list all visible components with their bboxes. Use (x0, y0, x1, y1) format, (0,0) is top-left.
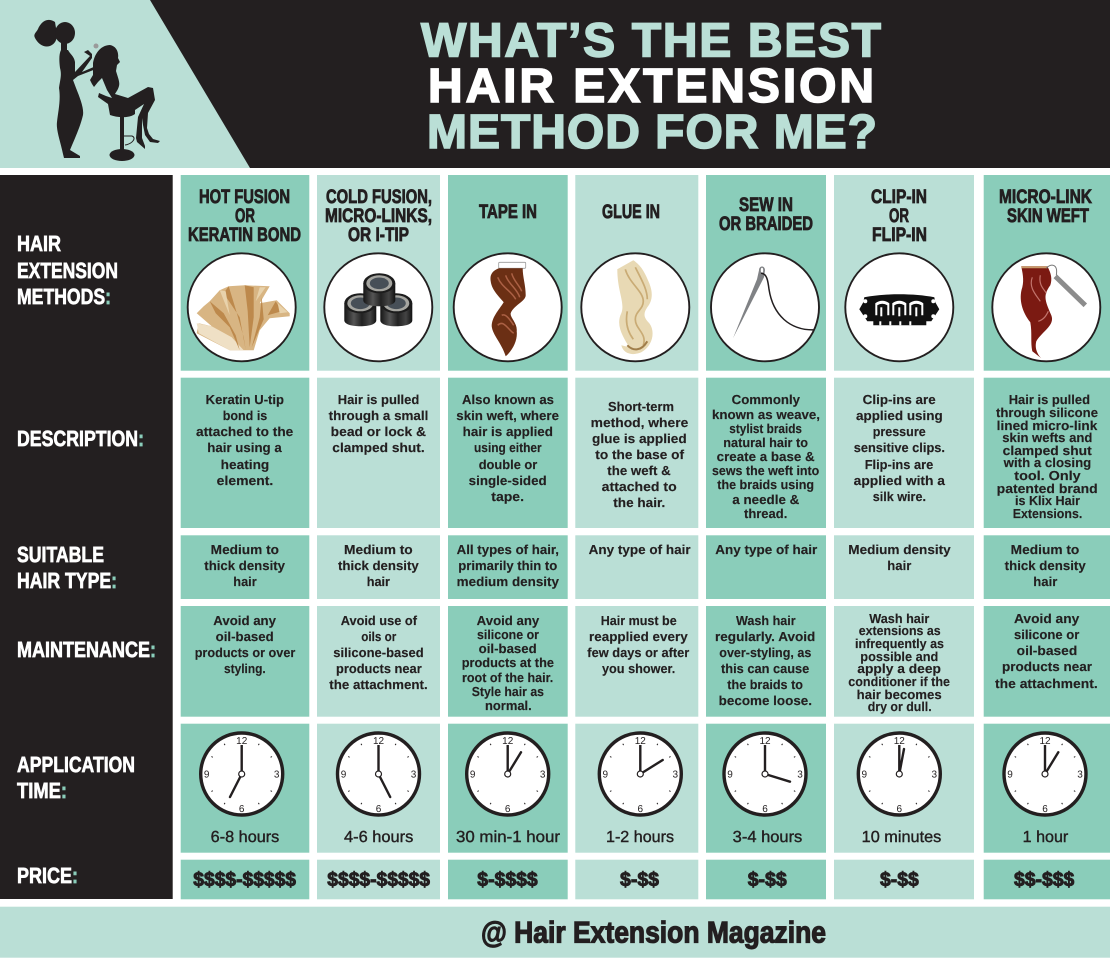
icon: micro-link skin weft and tool (992, 253, 1100, 361)
description: micro-link skin weft: clamped shut (1003, 443, 1092, 458)
method: clip-in or flip-in: CLIP-IN (871, 186, 927, 208)
maintenance: micro-link: oil-based (1017, 643, 1077, 658)
description: cold fusion: Hair is pulled (338, 392, 419, 407)
maintenance: glue in: Hair must be (601, 613, 677, 628)
hair type: cold fusion: Medium to (344, 542, 413, 557)
maintenance: cold fusion: silicone-based (333, 645, 424, 660)
time: 6-8 hours (181, 724, 309, 853)
description: sew in: stylist braids (729, 421, 802, 436)
description: micro-link skin weft: patented brand (997, 481, 1098, 496)
maintenance: glue in: few days or after (587, 645, 689, 660)
price: glue in (575, 860, 698, 899)
price: hot fusion: $$$$-$$$$$ (193, 869, 296, 891)
description: glue in: glue is applied (592, 431, 687, 446)
icon: clock: 12 (635, 736, 646, 747)
time: 1 hour: 1 hour (1023, 829, 1069, 846)
title: WHAT’S THE BEST (421, 14, 881, 68)
header dark background (0, 0, 1110, 168)
hair type: glue in (575, 535, 698, 599)
maintenance: glue in: reapplied every (589, 629, 688, 644)
footer credit bar: @ Hair Extension Magazine (481, 917, 826, 950)
hair type: micro-link: hair (1033, 574, 1057, 589)
description: micro-link skin weft: through silicone (996, 405, 1098, 420)
hair type: tape in: All types of hair, (457, 542, 559, 557)
maintenance: cold fusion: products near (336, 661, 422, 676)
maintenance: cold fusion: the attachment. (329, 677, 428, 692)
header teal wedge (0, 0, 250, 168)
icon: clock: 9 (603, 770, 609, 780)
description: tape in: single-sided (469, 473, 547, 488)
icon: clock: 12 (236, 736, 248, 747)
method: cold fusion, micro-links or i-tip: MICRO-LINKS, (325, 205, 432, 227)
icon: clock: 6 (897, 804, 903, 815)
hair type: cold fusion (317, 535, 440, 599)
hair type: clip-in: hair (887, 558, 911, 573)
hair type: micro-link: thick density (1005, 558, 1086, 573)
maintenance: tape in: silicone or (477, 627, 539, 642)
icon: clock: 12 (1039, 736, 1051, 747)
method: cold fusion, micro-links or i-tip: OR I-TIP (348, 224, 409, 246)
icon: tape-in hair weft (454, 253, 562, 361)
maintenance: hot fusion: products or over (195, 645, 295, 660)
row: hair extension methods (181, 175, 1110, 371)
description: tape in: skin weft, where (456, 408, 559, 423)
icon: clock (858, 733, 940, 815)
maintenance: micro-link: products near (1002, 659, 1092, 674)
method: clip-in or flip-in: FLIP-IN (872, 224, 927, 246)
time: 6-8 hours: 6-8 hours (211, 829, 279, 846)
maintenance: sew in: this can cause (721, 661, 809, 676)
description: micro-link skin weft: is Klix Hair (1015, 493, 1080, 508)
price: clip-in (834, 860, 974, 899)
icon: clock: 3 (274, 770, 280, 780)
description: cold fusion: through a small (329, 408, 428, 423)
time: 1 hour (984, 724, 1110, 853)
icon: micro-link beads (324, 253, 432, 361)
maintenance: sew in: regularly. Avoid (715, 629, 815, 644)
description: hot fusion (181, 378, 309, 528)
method: tape in (448, 175, 568, 371)
method: hot fusion or keratin bond: OR (235, 205, 255, 227)
description: micro-link skin weft: Hair is pulled (1009, 392, 1090, 407)
description: tape in: Also known as (462, 392, 554, 407)
hair type: tape in: medium density (457, 574, 560, 589)
description: micro-link skin weft: with a closing (1003, 455, 1091, 470)
price: cold fusion: $$$$-$$$$$ (327, 869, 430, 891)
title: HAIR EXTENSION (428, 60, 874, 113)
method: sew in or braided: OR BRAIDED (719, 213, 813, 235)
time: 4-6 hours: 4-6 hours (344, 829, 413, 846)
hair type: sew in: Any type of hair (715, 542, 817, 557)
footer credit bar (0, 907, 1110, 958)
icon: hair clip (845, 253, 953, 361)
maintenance: hot fusion: styling. (224, 661, 266, 676)
panel: row labels: APPLICATION (17, 752, 135, 777)
description: sew in (706, 378, 826, 528)
description: clip-in: Flip-ins are (865, 457, 933, 472)
icon: clock (338, 733, 420, 815)
method: clip-in or flip-in (834, 175, 974, 371)
maintenance: clip-in: conditioner if the (848, 674, 950, 689)
hair type: tape in (448, 535, 568, 599)
description: tape in: double or (479, 457, 537, 472)
hair type: clip-in (834, 535, 974, 599)
hair type: hot fusion: thick density (204, 558, 286, 573)
description: hot fusion: heating (221, 457, 269, 472)
panel: row labels: EXTENSION (17, 258, 118, 283)
icon: clock: 12 (894, 736, 905, 747)
description: sew in: Commonly (732, 392, 801, 407)
description: sew in: thread. (744, 506, 787, 521)
maintenance: glue in: you shower. (602, 661, 675, 676)
description: hot fusion: element. (217, 473, 273, 488)
price: glue in: $-$$ (620, 869, 659, 891)
method: glue in: GLUE IN (602, 201, 660, 223)
panel: row labels: HAIR TYPE: (17, 568, 117, 593)
icon: clock: 12 (373, 736, 384, 747)
icon: clock: 9 (862, 770, 868, 780)
description: glue in: the weft & (607, 463, 671, 478)
panel: row labels (0, 175, 173, 899)
icon: needle and thread (711, 253, 819, 361)
maintenance: tape in (448, 606, 568, 717)
icon: clock: 6 (376, 804, 382, 815)
method: sew in or braided (706, 175, 826, 371)
description: glue in: Short-term (608, 399, 674, 414)
price: micro-link: $$-$$$ (1014, 869, 1074, 891)
price: hot fusion (181, 860, 309, 899)
description: micro-link skin weft: Extensions. (1013, 506, 1082, 521)
maintenance: micro-link (984, 606, 1110, 717)
icon: glue-in blonde weft (581, 253, 689, 361)
description: glue in: the hair. (613, 495, 665, 510)
description: glue in: to the base of (595, 447, 685, 462)
icon: clock (467, 733, 549, 815)
icon: clock (599, 733, 681, 815)
icon: clock: 9 (204, 770, 210, 780)
icon: clock (724, 733, 806, 815)
icon: clock: 3 (411, 770, 417, 780)
method: glue in (575, 175, 698, 371)
panel: row labels: METHODS: (17, 284, 111, 309)
panel: row labels: HAIR (17, 231, 61, 256)
hair type: micro-link: Medium to (1011, 542, 1079, 557)
icon: clock: 3 (932, 770, 938, 780)
maintenance: sew in: become loose. (719, 693, 812, 708)
title (421, 14, 881, 159)
description: clip-in: silk wire. (873, 489, 926, 504)
price: tape in (448, 860, 568, 899)
time: 30 min-1 hour (448, 724, 568, 853)
price: cold fusion (317, 860, 440, 899)
maintenance: tape in: Style hair as (472, 684, 544, 699)
icon: clock: 9 (1007, 770, 1013, 780)
description: clip-in: sensitive clips. (854, 440, 945, 455)
maintenance: micro-link: Avoid any (1014, 611, 1080, 626)
maintenance: tape in: oil-based (479, 641, 537, 656)
description: clip-in: Clip-ins are (863, 392, 936, 407)
hair type: glue in: Any type of hair (589, 542, 691, 557)
icon: clock: 6 (638, 804, 644, 815)
price: clip-in: $-$$ (880, 869, 919, 891)
maintenance: tape in: Avoid any (477, 613, 540, 628)
maintenance: sew in: Wash hair (736, 613, 796, 628)
icon: clock: 3 (797, 770, 803, 780)
description: micro-link skin weft: skin wefts and (1002, 430, 1092, 445)
description: hot fusion: attached to the (196, 424, 293, 439)
maintenance: clip-in: Wash hair (869, 611, 929, 626)
description: hot fusion: hair using a (207, 440, 282, 455)
description: hot fusion: Keratin U-tip (206, 392, 284, 407)
icon: clock: 3 (540, 770, 546, 780)
method: cold fusion, micro-links or i-tip: COLD FUSION, (326, 186, 432, 208)
icon: clock: 6 (505, 804, 511, 815)
icon: clock: 3 (1077, 770, 1083, 780)
row: suitable hair type (181, 535, 1110, 599)
maintenance: cold fusion: Avoid use of (341, 613, 418, 628)
maintenance: clip-in: hair becomes (857, 687, 942, 702)
price: sew in: $-$$ (748, 869, 787, 891)
maintenance: tape in: products at the (462, 655, 554, 670)
description: tape in: tape. (491, 489, 524, 504)
description: clip-in: pressure (873, 424, 926, 439)
maintenance: cold fusion: oils or (361, 629, 396, 644)
icon: clock: 9 (727, 770, 733, 780)
description: sew in: create a base & (717, 449, 815, 464)
method: clip-in or flip-in: OR (889, 205, 909, 227)
description: tape in: hair is applied (463, 424, 553, 439)
method: hot fusion or keratin bond: KERATIN BOND (188, 224, 301, 246)
maintenance: hot fusion: oil-based (216, 629, 274, 644)
panel: row labels: PRICE: (17, 863, 78, 888)
description: clip-in: applied using (856, 408, 943, 423)
hair type: sew in (706, 535, 826, 599)
row: maintenance (181, 606, 1110, 717)
description: glue in: attached to (602, 479, 677, 494)
row: application time (181, 724, 1110, 853)
page header (0, 0, 1110, 168)
description: sew in: sews the weft into (712, 463, 819, 478)
panel: row labels: SUITABLE (17, 542, 104, 567)
time: 1-2 hours (575, 724, 698, 853)
maintenance: micro-link: silicone or (1014, 627, 1079, 642)
price: sew in (706, 860, 826, 899)
panel: row labels: MAINTENANCE: (17, 637, 156, 662)
hair type: hot fusion (181, 535, 309, 599)
hair type: clip-in: Medium density (848, 542, 951, 557)
maintenance: hot fusion: Avoid any (213, 613, 277, 628)
method: hot fusion or keratin bond: HOT FUSION (199, 186, 290, 208)
description: micro-link skin weft: tool. Only (1014, 468, 1082, 483)
time: 10 minutes (834, 724, 974, 853)
description: tape in: using either (474, 440, 542, 455)
panel: row labels: DESCRIPTION: (17, 426, 144, 451)
icon: clock: 12 (502, 736, 514, 747)
maintenance: tape in: root of the hair. (462, 670, 553, 685)
maintenance: clip-in: apply a deep (857, 661, 941, 676)
description: glue in: method, where (591, 415, 688, 430)
method: hot fusion or keratin bond (181, 175, 309, 371)
description: glue in (575, 378, 698, 528)
time: 1-2 hours: 1-2 hours (606, 829, 674, 846)
maintenance: clip-in: infrequently as (855, 636, 944, 651)
icon: salon silhouette (34, 20, 160, 161)
icon: clock: 6 (239, 804, 245, 815)
icon: clock: 6 (1042, 804, 1048, 815)
description: clip-in (834, 378, 974, 528)
panel: row labels: TIME: (17, 778, 67, 803)
hair type: micro-link (984, 535, 1110, 599)
description: hot fusion: bond is (223, 408, 267, 423)
description: sew in: natural hair to (723, 435, 808, 450)
hair type: tape in: primarily thin to (458, 558, 557, 573)
hair type: cold fusion: thick density (338, 558, 419, 573)
maintenance: sew in: the braids to (727, 677, 803, 692)
maintenance: hot fusion (181, 606, 309, 717)
time: 3-4 hours: 3-4 hours (733, 829, 802, 846)
time: 3-4 hours (706, 724, 826, 853)
method: cold fusion, micro-links or i-tip (317, 175, 440, 371)
method: micro-link skin weft (984, 175, 1110, 371)
icon: clock: 9 (470, 770, 476, 780)
maintenance: clip-in: dry or dull. (868, 699, 932, 714)
description: sew in: a needle & (732, 492, 799, 507)
description: tape in (448, 378, 568, 528)
maintenance: clip-in: extensions as (859, 623, 941, 638)
price: tape in: $-$$$$ (477, 869, 538, 891)
row: description (181, 378, 1110, 528)
row: price (181, 860, 1110, 899)
description: micro-link skin weft: lined micro-link (997, 418, 1098, 433)
maintenance: sew in (706, 606, 826, 717)
icon: clock: 12 (759, 736, 771, 747)
maintenance: tape in: normal. (485, 698, 532, 713)
icon: keratin bond strands (188, 253, 296, 361)
hair type: hot fusion: Medium to (211, 542, 279, 557)
icon: clock (201, 733, 283, 815)
maintenance: clip-in (834, 606, 974, 717)
description: cold fusion (317, 378, 440, 528)
method: tape in: TAPE IN (479, 201, 537, 223)
description: clip-in: applied with a (854, 473, 946, 488)
description: micro-link skin weft (984, 378, 1110, 528)
description: sew in: known as weave, (712, 407, 820, 422)
price: micro-link (984, 860, 1110, 899)
description: sew in: the braids using (717, 477, 814, 492)
icon: clock (1004, 733, 1086, 815)
time: 4-6 hours (317, 724, 440, 853)
description: cold fusion: clamped shut. (332, 440, 425, 455)
title: METHOD FOR ME? (427, 106, 877, 159)
maintenance: cold fusion (317, 606, 440, 717)
hair type: cold fusion: hair (367, 574, 390, 589)
method: sew in or braided: SEW IN (739, 194, 793, 216)
description: cold fusion: bead or lock & (331, 424, 426, 439)
maintenance: micro-link: the attachment. (995, 676, 1098, 691)
icon: clock: 6 (762, 804, 768, 815)
icon: clock: 3 (673, 770, 679, 780)
icon: clock: 9 (341, 770, 347, 780)
time: 30 min-1 hour: 30 min-1 hour (456, 829, 561, 846)
maintenance: glue in (575, 606, 698, 717)
hair type: hot fusion: hair (233, 574, 257, 589)
time: 10 minutes: 10 minutes (862, 829, 941, 846)
maintenance: clip-in: possible and (860, 649, 938, 664)
maintenance: sew in: over-styling, as (719, 645, 811, 660)
